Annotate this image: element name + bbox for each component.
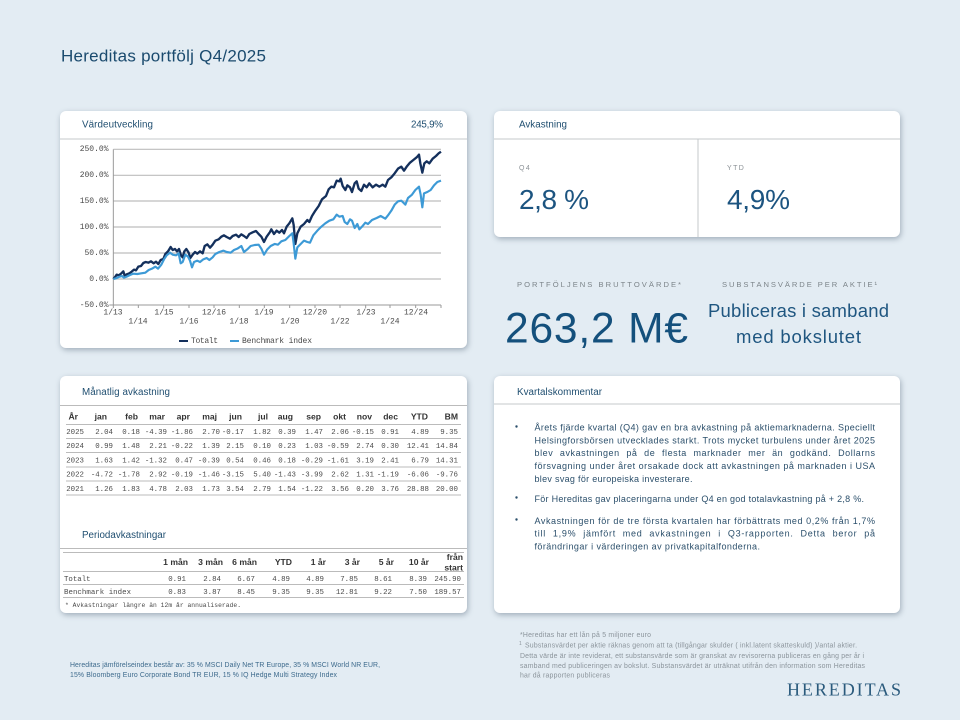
monthly return table: sep xyxy=(306,412,321,422)
commentary bullets: försvagning under året orsakade dock att avkastningen på marknaden i USA xyxy=(534,461,875,471)
monthly return table: -0.29 xyxy=(301,457,323,465)
monthly return table: 0.91 xyxy=(381,429,400,437)
monthly return table: -4.72 xyxy=(91,472,113,480)
y axis labels: 0.0% xyxy=(89,275,109,284)
x axis labels: 1/19 xyxy=(254,308,274,318)
x axis labels: 1/13 xyxy=(103,308,123,318)
heading: return: Avkastning xyxy=(519,120,567,130)
period returns table: 3 år xyxy=(345,557,361,567)
gross portfolio value: PORTFÖLJENS BRUTTOVÄRDE* xyxy=(517,280,681,289)
monthly return table: -1.46 xyxy=(198,472,220,480)
footnotes: loan and net asset value: Detta värde är inte reviderat, ett substansvärde som är granskat av revisorerna publiceras en gång per år i xyxy=(520,652,864,660)
monthly return table: 2022 xyxy=(66,472,84,480)
commentary bullets: För Hereditas gav placeringarna under Q4 en god totalavkastning på + 2,8 %. xyxy=(534,494,864,504)
monthly return table: 2023 xyxy=(66,457,84,465)
monthly return table: YTD xyxy=(411,412,428,422)
period returns table: 5 år xyxy=(379,557,395,567)
period returns table: Benchmark index xyxy=(64,589,132,597)
period returns table: start xyxy=(444,562,463,572)
monthly return table: apr xyxy=(177,412,191,422)
monthly return table: 2.03 xyxy=(175,486,193,494)
commentary bullets: blev avkastningen på de flesta marknader mer än godkänd. Dollarns xyxy=(534,448,876,458)
footnotes: loan and net asset value: 1 xyxy=(519,641,522,647)
monthly return table: 2.41 xyxy=(381,457,400,465)
monthly return table: 1.63 xyxy=(95,457,113,465)
monthly return table: 2.74 xyxy=(356,443,375,451)
period returns table: 245.90 xyxy=(434,576,461,584)
monthly return table: 6.79 xyxy=(411,457,429,465)
panel: value development xyxy=(60,111,467,348)
monthly return table: jul xyxy=(257,412,268,422)
footnote: benchmark composition: Hereditas jämförelseindex består av: 35 % MSCI Daily Net TR Europe, 35 % MSCI World NR EUR, xyxy=(70,661,380,669)
period returns table: 2.84 xyxy=(203,576,222,584)
monthly return table: 20.00 xyxy=(436,486,458,494)
net asset value per share: Publiceras i samband xyxy=(708,300,889,321)
monthly return table xyxy=(60,406,467,495)
period returns table xyxy=(60,548,467,609)
monthly return table: 2021 xyxy=(66,486,85,494)
period returns table: 0.91 xyxy=(168,576,187,584)
series: Benchmark index xyxy=(113,181,441,279)
monthly return table: okt xyxy=(333,412,346,422)
x axis labels: 1/15 xyxy=(154,308,174,318)
net asset value per share xyxy=(708,280,889,347)
heading: period returns: Periodavkastningar xyxy=(82,530,167,541)
monthly return table: 1.48 xyxy=(122,443,140,451)
period returns table: 7.85 xyxy=(340,576,358,584)
footnotes: loan and net asset value: har då rapporten publiceras xyxy=(520,672,611,680)
monthly return table: 12.41 xyxy=(407,443,430,451)
y axis labels: 50.0% xyxy=(84,249,109,258)
commentary bullets: blev svag för europeiska investerare. xyxy=(534,474,692,484)
legend xyxy=(179,337,312,346)
x axis labels: 1/20 xyxy=(280,318,300,326)
monthly return table: 14.84 xyxy=(436,443,459,451)
monthly return table: 1.39 xyxy=(202,443,220,451)
net asset value per share: SUBSTANSVÄRDE PER AKTIE¹ xyxy=(722,280,877,289)
period returns table: 12.81 xyxy=(336,589,359,597)
monthly return table: 2.04 xyxy=(95,429,114,437)
period returns table: 8.61 xyxy=(374,576,393,584)
commentary bullets xyxy=(515,422,876,551)
monthly return table: 1.82 xyxy=(253,429,271,437)
x axis labels: 1/22 xyxy=(330,318,350,326)
monthly return table: 2.79 xyxy=(253,486,271,494)
period returns table: Totalt xyxy=(64,576,91,584)
monthly return table: 0.20 xyxy=(356,486,374,494)
heading: quarterly commentary: Kvartalskommentar xyxy=(517,387,603,398)
y axis labels: 100.0% xyxy=(80,223,109,232)
monthly return table: 1.47 xyxy=(305,429,323,437)
net asset value per share: med bokslutet xyxy=(736,326,861,347)
monthly return table: -1.32 xyxy=(145,457,167,465)
gross portfolio value: 263,2 M€ xyxy=(505,306,688,352)
period returns table: 4.89 xyxy=(272,576,290,584)
monthly return table: År xyxy=(68,412,79,422)
monthly return table: BM xyxy=(445,412,458,422)
gross portfolio value xyxy=(505,280,688,352)
monthly return table: -3.99 xyxy=(301,472,323,480)
monthly return table: -0.15 xyxy=(352,429,374,437)
monthly return table: -0.17 xyxy=(222,429,244,437)
monthly return table: 0.18 xyxy=(122,429,140,437)
monthly return table: -4.39 xyxy=(145,429,167,437)
monthly return table: -9.76 xyxy=(436,472,458,480)
monthly return table: 3.76 xyxy=(381,486,399,494)
monthly return table: 28.88 xyxy=(407,486,429,494)
y axis labels: -50.0% xyxy=(80,301,109,310)
Q4 label: Q4 xyxy=(519,165,531,172)
monthly return table: 0.99 xyxy=(95,443,113,451)
commentary bullets: Helsingforsbörsen utvecklades starkt. Trots mycket turbulens under året 2025 xyxy=(534,435,875,445)
y axis labels xyxy=(80,145,109,310)
legend: Totalt xyxy=(191,337,218,346)
period returns table: 0.83 xyxy=(168,589,186,597)
x axis labels: 1/16 xyxy=(179,318,199,326)
commentary bullets: förändringar i värderingen av privatkapitalfonderna. xyxy=(534,541,760,551)
logo: Hereditas: HEREDITAS xyxy=(787,680,901,700)
monthly return table: -0.22 xyxy=(171,443,193,451)
monthly return table: 1.83 xyxy=(122,486,140,494)
footnotes: loan and net asset value xyxy=(519,631,866,680)
panel: monthly and period returns xyxy=(60,376,467,613)
monthly return table: 1.03 xyxy=(305,443,323,451)
monthly return table: aug xyxy=(278,412,293,422)
period returns table: 8.39 xyxy=(409,576,427,584)
monthly return table: 4.78 xyxy=(149,486,167,494)
panel: return xyxy=(494,111,900,237)
x axis labels: 1/18 xyxy=(229,318,249,326)
monthly return table: -1.43 xyxy=(274,472,296,480)
heading: monthly return: Månatlig avkastning xyxy=(82,387,170,398)
footnotes: loan and net asset value: Substansvärdet per aktie räknas genom att ta (tillgångar skulder ( inkl.latent skatteskuld) )/antal aktier. xyxy=(525,642,857,650)
monthly return table: dec xyxy=(383,412,398,422)
monthly return table: -1.19 xyxy=(377,472,399,480)
period returns table: 189.57 xyxy=(434,589,461,597)
monthly return table: 2.70 xyxy=(202,429,220,437)
monthly return table: 0.18 xyxy=(278,457,296,465)
monthly return table: -6.06 xyxy=(407,472,429,480)
footnotes: loan and net asset value: *Hereditas har ett lån på 5 miljoner euro xyxy=(520,631,651,639)
monthly return table: 0.54 xyxy=(226,457,245,465)
period returns table: 9.35 xyxy=(272,589,290,597)
monthly return table: -3.15 xyxy=(222,472,244,480)
x axis labels: 12/20 xyxy=(303,308,327,318)
monthly return table: 0.10 xyxy=(253,443,271,451)
monthly return table: -1.61 xyxy=(327,457,350,465)
period returns table: YTD xyxy=(275,557,292,567)
y axis labels: 250.0% xyxy=(80,145,109,154)
commentary bullets: till 1,9% jämfört med avkastningen i Q3-rapporten. Detta beror på xyxy=(534,529,875,539)
monthly return table: 14.31 xyxy=(436,457,459,465)
footnotes: loan and net asset value: samband med publiceringen av bokslut. Substansvärdet är uträknat utifrån den information som Hereditas xyxy=(520,662,866,670)
period returns table: * Avkastningar längre än 12m år annualiserade. xyxy=(65,601,241,609)
period returns table: 9.35 xyxy=(306,589,324,597)
monthly return table: -1.86 xyxy=(171,429,193,437)
period returns table: 9.22 xyxy=(374,589,392,597)
period returns table: från xyxy=(447,552,463,562)
y axis labels: 150.0% xyxy=(80,197,109,206)
monthly return table: jun xyxy=(228,412,242,422)
monthly return table: feb xyxy=(125,412,138,422)
x axis labels: 12/16 xyxy=(202,308,226,318)
monthly return table: -1.22 xyxy=(301,486,323,494)
panel: quarterly commentary xyxy=(494,376,900,613)
x axis labels xyxy=(103,308,428,326)
monthly return table: -0.39 xyxy=(198,457,220,465)
monthly return table: 3.56 xyxy=(331,486,349,494)
monthly return table: maj xyxy=(202,412,217,422)
y axis labels: 200.0% xyxy=(80,171,109,180)
monthly return table: 9.35 xyxy=(440,429,458,437)
monthly return table: 2.21 xyxy=(149,443,168,451)
heading: value development: Värdeutveckling xyxy=(82,120,153,130)
monthly return table: 5.40 xyxy=(253,472,271,480)
period returns table: 3.87 xyxy=(203,589,221,597)
line chart xyxy=(80,145,441,346)
monthly return table: 1.26 xyxy=(95,486,113,494)
x axis labels: 12/24 xyxy=(404,308,428,318)
monthly return table: 1.31 xyxy=(356,472,375,480)
x axis labels: 1/14 xyxy=(128,318,148,326)
period returns table: 3 mån xyxy=(198,557,223,567)
monthly return table: nov xyxy=(357,412,372,422)
monthly return table: 2.92 xyxy=(149,472,167,480)
monthly return table: -1.78 xyxy=(118,472,140,480)
YTD label: YTD xyxy=(727,165,745,172)
monthly return table: 0.23 xyxy=(278,443,296,451)
commentary bullets: Årets fjärde kvartal (Q4) gav en bra avkastning på aktiemarknaderna. Speciellt xyxy=(534,422,875,432)
monthly return table: 2.15 xyxy=(226,443,244,451)
monthly return table: 3.54 xyxy=(226,486,245,494)
monthly return table: 0.47 xyxy=(175,457,193,465)
legend: Benchmark index xyxy=(242,337,312,346)
monthly return table: 2024 xyxy=(66,443,85,451)
monthly return table: jan xyxy=(94,412,107,422)
monthly return table: 4.89 xyxy=(411,429,429,437)
monthly return table: 1.73 xyxy=(202,486,220,494)
monthly return table: -0.59 xyxy=(327,443,349,451)
monthly return table: 0.30 xyxy=(381,443,399,451)
monthly return table: 1.42 xyxy=(122,457,140,465)
series: Totalt xyxy=(113,152,441,279)
monthly return table: 0.46 xyxy=(253,457,271,465)
monthly return table: -0.19 xyxy=(171,472,193,480)
period returns table: 1 år xyxy=(311,557,327,567)
footnote: benchmark composition xyxy=(70,661,380,679)
period returns table: 10 år xyxy=(409,557,430,567)
monthly return table: mar xyxy=(149,412,166,422)
footnote: benchmark composition: 15% Bloomberg Euro Corporate Bond TR EUR, 15 % IQ Hedge Multi Strategy Index xyxy=(70,672,338,679)
period returns table: 4.89 xyxy=(306,576,324,584)
period returns table: 8.45 xyxy=(237,589,255,597)
monthly return table: 2.62 xyxy=(331,472,349,480)
period returns table: 6 mån xyxy=(232,557,257,567)
commentary bullets: Avkastningen för de tre första kvartalen har förbättrats med 0,2% från 1,7% xyxy=(534,516,875,526)
YTD value: 4,9% xyxy=(727,184,790,215)
period returns table: 1 mån xyxy=(163,557,188,567)
period returns table: 6.67 xyxy=(237,576,255,584)
Q4 value: 2,8 % xyxy=(519,184,589,215)
monthly return table: 2.06 xyxy=(331,429,349,437)
monthly return table: 0.39 xyxy=(278,429,296,437)
title: Hereditas portfölj Q4/2025 xyxy=(61,46,266,66)
total return figure: 245,9% xyxy=(411,120,443,130)
monthly return table: 2025 xyxy=(66,429,84,437)
monthly return table: 1.54 xyxy=(278,486,297,494)
monthly return table: 3.19 xyxy=(356,457,374,465)
x axis labels: 1/24 xyxy=(380,318,400,326)
period returns table: 7.50 xyxy=(409,589,427,597)
x axis labels: 1/23 xyxy=(356,308,376,318)
